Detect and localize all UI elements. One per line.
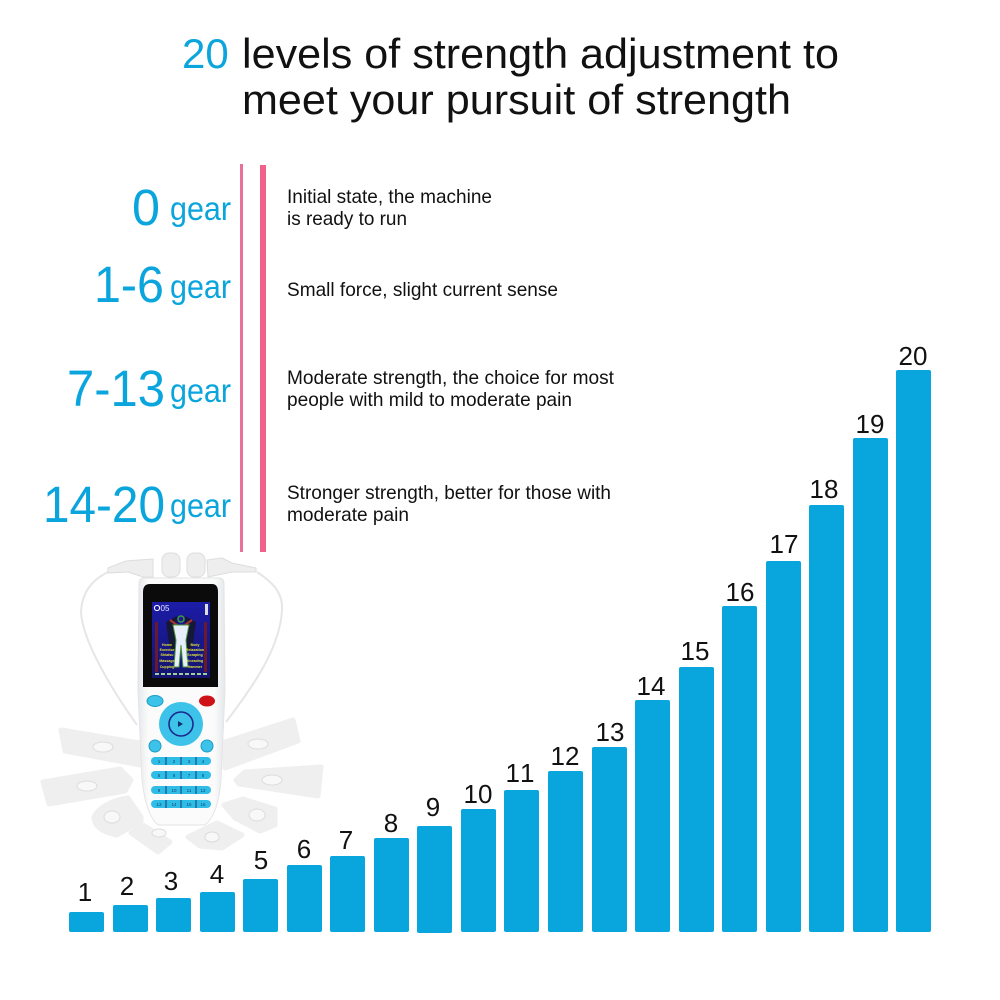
icon: keypad: 9 xyxy=(158,788,161,793)
gear descriptions xyxy=(287,186,615,526)
icon: keypad: 3 xyxy=(188,759,191,764)
icon: keypad: 13 xyxy=(156,802,162,807)
icon: keypad: 1 xyxy=(158,759,161,764)
icon: device screen: Relaxation xyxy=(186,648,204,652)
icon: keypad: 10 xyxy=(171,788,177,793)
bar value labels: 6 xyxy=(297,834,311,864)
bar value labels: 9 xyxy=(426,792,440,822)
gear labels: gear xyxy=(170,372,231,409)
icon: keypad: 15 xyxy=(186,802,192,807)
bar value labels: 10 xyxy=(464,779,492,809)
icon: keypad: 5 xyxy=(158,773,161,778)
icon: power button xyxy=(199,696,215,706)
icon: device body xyxy=(138,578,225,825)
bars xyxy=(69,370,931,933)
bar value labels: 18 xyxy=(810,474,838,504)
icon: device screen: Scraping xyxy=(187,653,203,657)
icon: plugs and top knobs xyxy=(108,553,256,577)
icon: keypad: 7 xyxy=(188,773,191,778)
title: levels of strength adjustment to xyxy=(242,30,839,77)
gear labels: gear xyxy=(170,268,231,305)
gear labels: 1-6 xyxy=(94,256,164,313)
icon: keypad: 12 xyxy=(200,788,206,793)
bar value labels: 15 xyxy=(681,636,709,666)
icon: device screen: Body xyxy=(191,643,199,647)
title: meet your pursuit of strength xyxy=(242,76,791,123)
icon: device screen: 05 xyxy=(161,604,170,613)
gear descriptions: people with mild to moderate pain xyxy=(287,389,572,411)
title xyxy=(182,30,839,123)
icon: keypad: 11 xyxy=(187,788,192,793)
bar value labels: 17 xyxy=(770,529,798,559)
title: 20 xyxy=(182,30,229,77)
bar chart: strength levels 1 to 20 xyxy=(69,341,931,933)
icon: keypad: 8 xyxy=(202,773,205,778)
gear labels: 7-13 xyxy=(67,360,165,417)
icon: device screen: Cupping xyxy=(160,665,174,669)
icon: lead wires xyxy=(81,572,282,725)
gear descriptions: Moderate strength, the choice for most xyxy=(287,367,615,389)
icon: device screen xyxy=(152,602,210,678)
icon: TENS device with electrode pads xyxy=(43,553,321,852)
icon: keypad: 16 xyxy=(200,802,206,807)
bar value labels: 4 xyxy=(210,859,224,889)
bar value labels xyxy=(78,341,927,907)
bar value labels: 11 xyxy=(506,758,534,788)
icon: keypad: 6 xyxy=(173,773,176,778)
bar value labels: 19 xyxy=(856,409,884,439)
gear descriptions: Initial state, the machine xyxy=(287,186,492,208)
icon: device screen: Exercise xyxy=(160,648,174,652)
bar value labels: 13 xyxy=(596,717,624,747)
gear descriptions: Small force, slight current sense xyxy=(287,279,558,301)
gear descriptions: Stronger strength, better for those with xyxy=(287,482,611,504)
icon: device screen: Shiatsu xyxy=(161,653,173,657)
icon: direction pad xyxy=(159,702,203,746)
gear labels xyxy=(43,179,231,533)
icon: device screen: Kneading xyxy=(187,659,203,663)
icon: black screen bezel xyxy=(143,584,218,687)
bar value labels: 16 xyxy=(726,577,754,607)
gear labels: gear xyxy=(170,190,231,227)
icon: keypad: 4 xyxy=(202,759,205,764)
pink divider lines xyxy=(240,164,266,552)
bar value labels: 8 xyxy=(384,808,398,838)
bar value labels: 12 xyxy=(551,741,579,771)
icon: pad snap connectors xyxy=(77,739,282,842)
gear labels: gear xyxy=(170,487,231,524)
gear labels: 14-20 xyxy=(43,476,165,533)
bar value labels: 2 xyxy=(120,871,134,901)
bar value labels: 5 xyxy=(254,845,268,875)
gear labels: 0 xyxy=(132,179,160,236)
gear descriptions: is ready to run xyxy=(287,208,407,230)
icon: T button xyxy=(147,696,163,706)
bar value labels: 3 xyxy=(164,866,178,896)
icon: device screen: Home xyxy=(162,643,172,647)
icon: keypad: 2 xyxy=(173,759,176,764)
icon: electrode pads xyxy=(43,720,321,852)
bar value labels: 20 xyxy=(899,341,927,371)
bar value labels: 1 xyxy=(78,877,92,907)
gear descriptions: moderate pain xyxy=(287,504,409,526)
icon: keypad xyxy=(151,757,211,808)
icon: keypad: 14 xyxy=(171,802,177,807)
bar value labels: 7 xyxy=(339,825,353,855)
bar value labels: 14 xyxy=(637,671,665,701)
icon: side buttons xyxy=(149,740,213,752)
icon: device screen: Massage xyxy=(159,659,175,663)
icon: device screen: Hammer xyxy=(188,665,203,669)
